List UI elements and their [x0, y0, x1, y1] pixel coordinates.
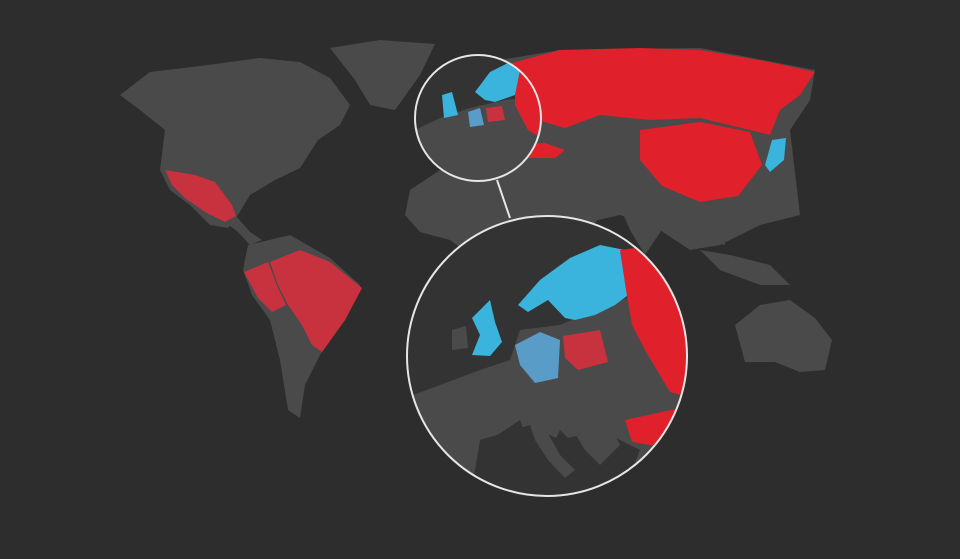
mediterranean: [474, 425, 640, 486]
ireland: [452, 326, 468, 350]
russia red: [505, 48, 815, 135]
southeast asia: [680, 205, 725, 245]
peru red: [244, 262, 286, 312]
turkey red: [625, 409, 676, 446]
uk blue: [472, 300, 502, 356]
scandinavia blue: [518, 245, 635, 320]
italy: [530, 425, 575, 478]
poland red: [486, 106, 505, 122]
uk blue: [442, 92, 458, 118]
small circle: [415, 55, 545, 185]
central america: [225, 216, 262, 245]
balkans: [576, 430, 620, 465]
scandinavia blue: [475, 62, 520, 102]
japan blue: [765, 138, 786, 172]
world map: [120, 40, 832, 497]
turkey red: [515, 143, 565, 158]
brazil red: [270, 250, 362, 352]
germany blue: [468, 108, 484, 127]
mexico red: [165, 170, 236, 222]
indonesia: [700, 250, 790, 285]
australia: [735, 300, 832, 372]
continent: north america: [120, 40, 435, 228]
china red: [640, 122, 762, 202]
greenland: [330, 40, 435, 110]
europe land: [414, 298, 680, 474]
germany blue: [515, 332, 560, 383]
continent: eurasia: [425, 48, 815, 255]
russia red: [620, 248, 686, 395]
big circle: europe zoom: [400, 216, 700, 500]
india: [615, 195, 670, 255]
poland red: [563, 330, 608, 370]
arabia: [540, 190, 600, 240]
africa: [405, 165, 575, 335]
continent: south america: [243, 235, 360, 418]
connector line: [497, 180, 510, 218]
